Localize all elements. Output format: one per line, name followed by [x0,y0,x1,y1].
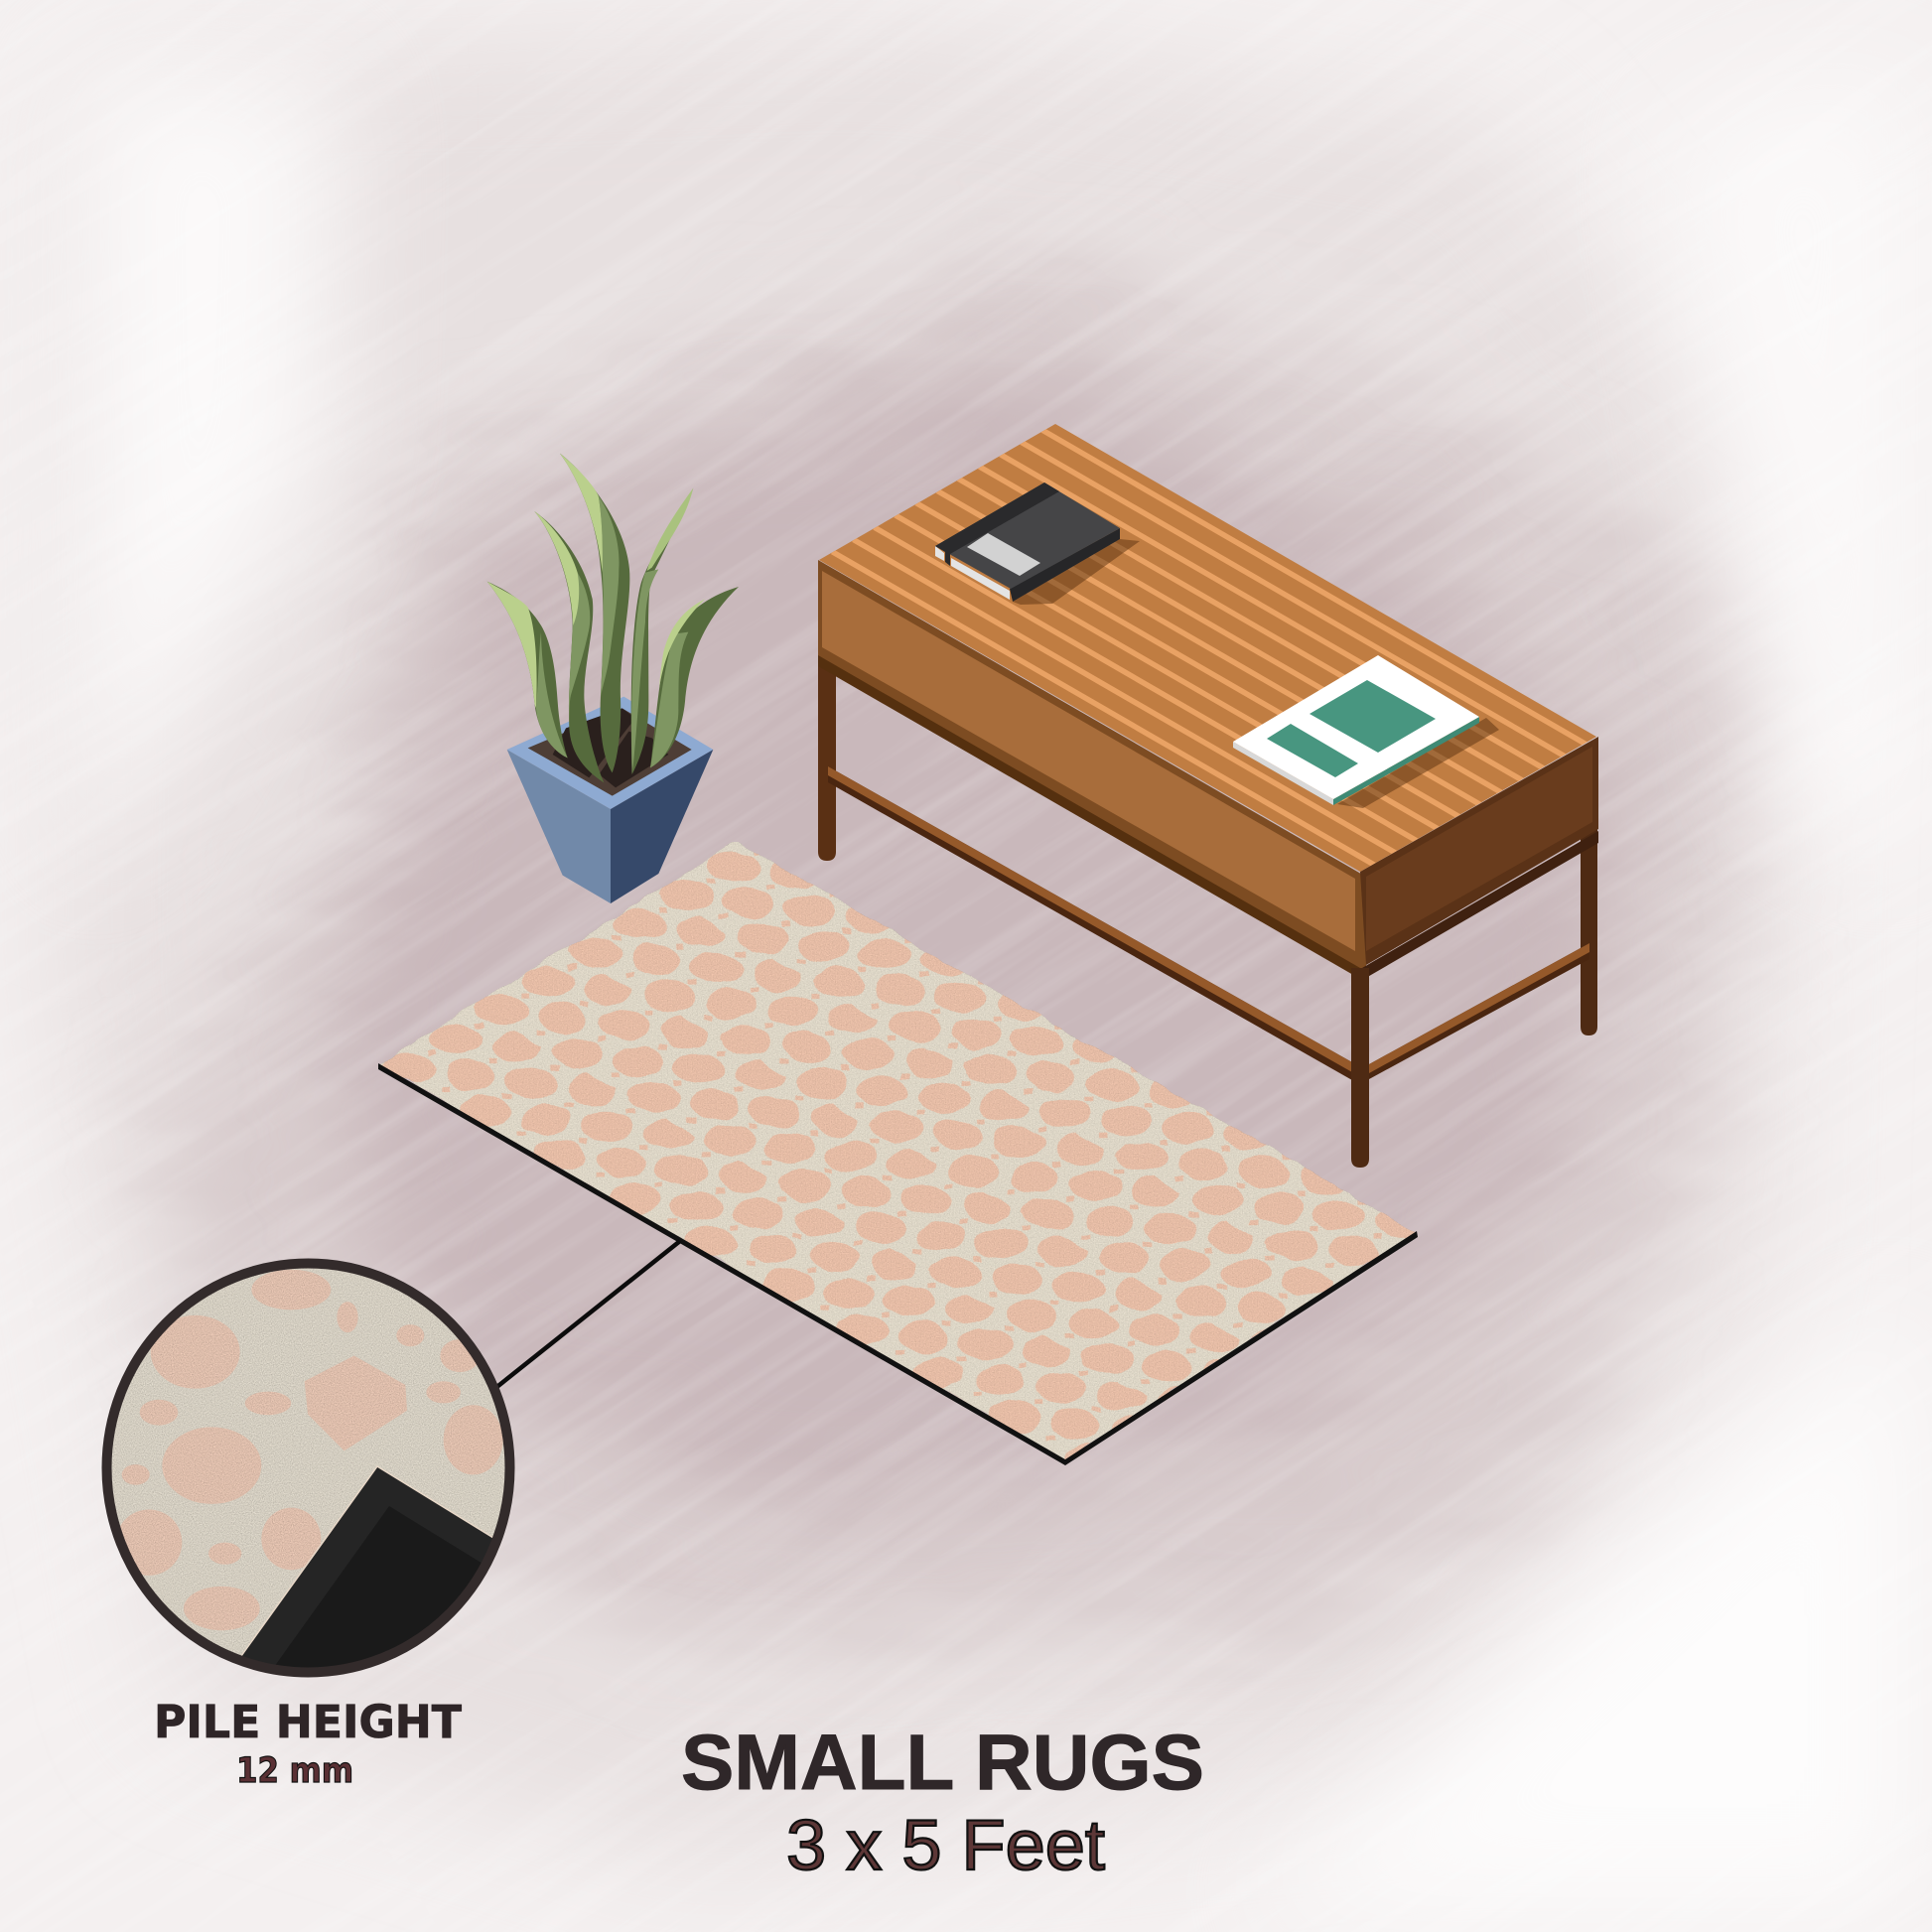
coffee table [818,424,1638,1168]
back left leg [818,645,836,861]
rug backing corner [228,1466,516,1688]
connector line [494,1241,680,1389]
front frame [818,560,1366,978]
left stretcher [828,766,1352,1080]
detail texture [111,1269,504,1668]
subtitle: rug size: 3 x 5 Feet [786,1807,1105,1885]
table top [819,424,1596,872]
right lower rail [1362,831,1598,979]
rug surface [378,842,1417,1460]
rug [378,842,1418,1465]
front panel [822,571,1355,951]
front leg [1351,968,1369,1168]
leaf far left [487,582,568,758]
front lower rail [818,655,1360,979]
leaf far right [650,587,739,767]
book [935,483,1140,605]
rug edge [378,1063,1418,1465]
leaf inner left [534,511,604,782]
plant [487,454,739,903]
lens ring [107,1263,510,1672]
pile height label: PILE HEIGHT [154,1696,462,1748]
title: SMALL RUGS [681,1718,1204,1806]
right stretcher [1369,943,1589,1079]
right panel [1366,747,1592,951]
leaf inner right [631,488,693,774]
magazine [1233,655,1499,808]
magnified rug detail circle [101,1259,516,1688]
top stripes [831,429,1587,866]
pile height value: 12 mm [236,1751,353,1791]
back right leg [1581,824,1597,1035]
right frame [1360,737,1598,965]
plant pot [507,697,713,903]
leaf centre [560,454,629,772]
